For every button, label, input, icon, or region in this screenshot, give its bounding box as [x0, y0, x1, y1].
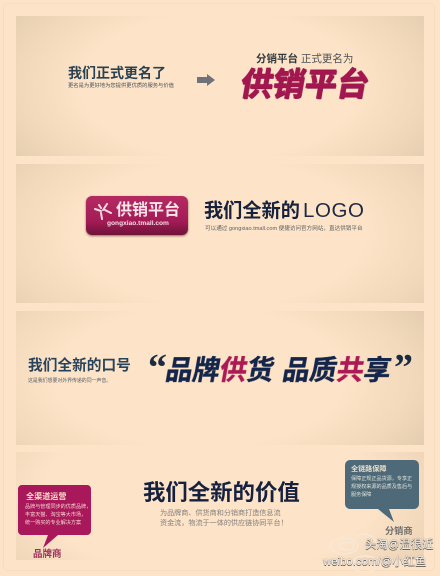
- opening quote: “: [148, 347, 167, 389]
- text: value description: [160, 509, 288, 526]
- callout text: distributor: 服务保障: [351, 492, 371, 498]
- caption: renamed: 更名是为更好地为您提供更优质的服务与价值: [68, 83, 174, 89]
- logo url: gongxiao.tmall.com: [107, 220, 169, 227]
- speech bubble: distributor: [345, 460, 419, 522]
- panel: renamed: [16, 16, 424, 156]
- label: brand owner: 品牌商: [33, 549, 62, 560]
- caption: slogan: 这是我们想要对外界传递的同一声音。: [28, 379, 111, 384]
- panel: logo: [16, 164, 424, 303]
- callout text: brand owner: 品牌与管理同步的优质品牌，: [25, 504, 91, 510]
- subheading: old name: 分销平台 正式更名为: [256, 53, 353, 65]
- text: weibo handle: 头淘@温很近: [365, 539, 434, 551]
- caption: logo: 可以通过 gongxiao.tmall.com 便捷访问官方网站，直达供销平台: [205, 226, 363, 232]
- label: distributor: 分销商: [385, 526, 413, 536]
- panel: slogan: [16, 311, 424, 445]
- icon: weibo eye: [330, 534, 378, 572]
- watermark: weibo: [322, 534, 434, 572]
- heading: logo: 我们全新的LOGO: [204, 199, 365, 222]
- icon: arrow: [197, 74, 215, 86]
- panel: value: [16, 452, 424, 560]
- logo badge: [86, 196, 188, 235]
- callout: distributor: [345, 460, 419, 536]
- closing quote: ”: [394, 347, 413, 389]
- slogan: 品牌供货品质共享: [163, 355, 394, 385]
- callout text: brand owner: 丰富天猫、淘宝等大市场，: [25, 512, 86, 518]
- callout text: distributor: [351, 476, 412, 498]
- heading: slogan: 我们全新的口号: [28, 358, 131, 374]
- callout heading: distributor: 全链路保障: [351, 465, 386, 473]
- callout text: distributor: 规授权来源的品质及售后与: [351, 484, 412, 490]
- heading: value: 我们全新的价值: [143, 480, 300, 505]
- heading: renamed: 我们正式更名了: [68, 65, 166, 81]
- callout text: distributor: 保障正规正品货源，专享正: [351, 476, 412, 482]
- logo wordmark: 供销平台: [116, 202, 180, 219]
- callout text: brand owner: 统一购买的专业解决方案: [25, 520, 81, 526]
- callout: brand owner: [18, 485, 91, 560]
- text: weibo url: weibo.com/@小红鱼: [323, 556, 426, 568]
- brand name: 供销平台: [238, 66, 372, 102]
- speech bubble: brand owner: [18, 485, 91, 548]
- callout heading: brand owner: 全渠道运营: [26, 492, 66, 501]
- icon: logo mark: [94, 203, 112, 220]
- text: value description: 为品牌商、供货商和分销商打造信息流: [160, 509, 281, 517]
- text: value description: 资金流，物流于一体的供应链协同平台！: [160, 518, 288, 526]
- callout text: brand owner: [25, 504, 91, 526]
